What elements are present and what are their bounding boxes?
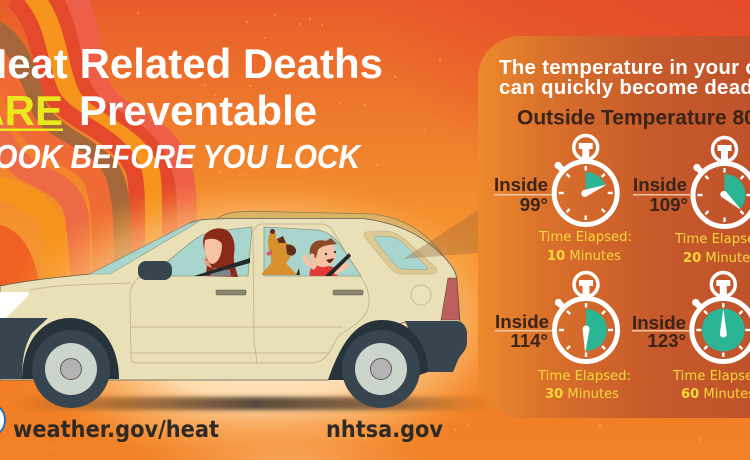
car xyxy=(0,211,467,408)
wavy heat stripes xyxy=(0,0,184,290)
ground shadow xyxy=(15,397,495,410)
fuel door xyxy=(411,285,431,305)
door handle: front xyxy=(216,290,246,295)
wheel arch: front xyxy=(22,318,119,379)
stopwatch: 30 minutes: 114° xyxy=(510,330,548,351)
stopwatch: 60 minutes xyxy=(632,272,750,402)
stopwatch: 10 minutes: 99° xyxy=(520,194,548,215)
child xyxy=(302,238,351,276)
front wheel xyxy=(32,330,110,408)
link: nhtsa.gov: nhtsa.gov xyxy=(326,417,443,443)
rear window xyxy=(264,227,361,276)
stopwatch: 30 minutes: Time Elapsed: xyxy=(537,369,631,384)
roof rack xyxy=(218,211,442,254)
stopwatch: 10 minutes: Time Elapsed: xyxy=(538,230,632,245)
driver xyxy=(194,228,250,277)
stopwatch: 30 minutes xyxy=(495,272,631,402)
rear bumper xyxy=(405,321,467,372)
stopwatch: 10 minutes: Inside xyxy=(494,174,548,195)
wheel arch: rear xyxy=(328,320,428,380)
panel heading xyxy=(499,56,750,99)
rear quarter window xyxy=(364,231,436,274)
stopwatch: 20 minutes xyxy=(633,138,750,266)
background glow xyxy=(0,175,535,460)
stopwatch: 30 minutes: Inside xyxy=(495,311,549,332)
bottom glow xyxy=(100,410,480,460)
stopwatch: 10 minutes xyxy=(494,136,632,264)
car body xyxy=(0,218,460,380)
callout pointer xyxy=(403,210,478,259)
stopwatch: 10 minutes: 10 Minutes xyxy=(547,249,621,264)
title xyxy=(0,48,382,131)
stopwatch: 20 minutes: 109° xyxy=(649,194,688,215)
door lines xyxy=(30,224,369,363)
title: Preventable xyxy=(79,87,317,134)
info panel xyxy=(478,36,750,418)
dog xyxy=(262,229,300,275)
link: weather.gov/heat: weather.gov/heat xyxy=(13,417,219,443)
stopwatch: 60 minutes: Inside xyxy=(632,312,686,333)
front bumper xyxy=(0,318,48,379)
background warm right tint xyxy=(370,0,750,230)
stopwatch: 20 minutes: Inside xyxy=(633,174,687,195)
rear wheel xyxy=(342,330,420,408)
door handle: rear xyxy=(333,290,363,295)
wing mirror xyxy=(138,261,172,280)
agency seal xyxy=(0,403,5,437)
stopwatch: 30 minutes: 30 Minutes xyxy=(545,387,619,402)
tail light xyxy=(441,278,460,320)
windshield xyxy=(90,220,200,274)
stopwatch: 60 minutes: 123° xyxy=(647,330,686,351)
headlight xyxy=(0,292,29,318)
front window xyxy=(167,226,252,276)
